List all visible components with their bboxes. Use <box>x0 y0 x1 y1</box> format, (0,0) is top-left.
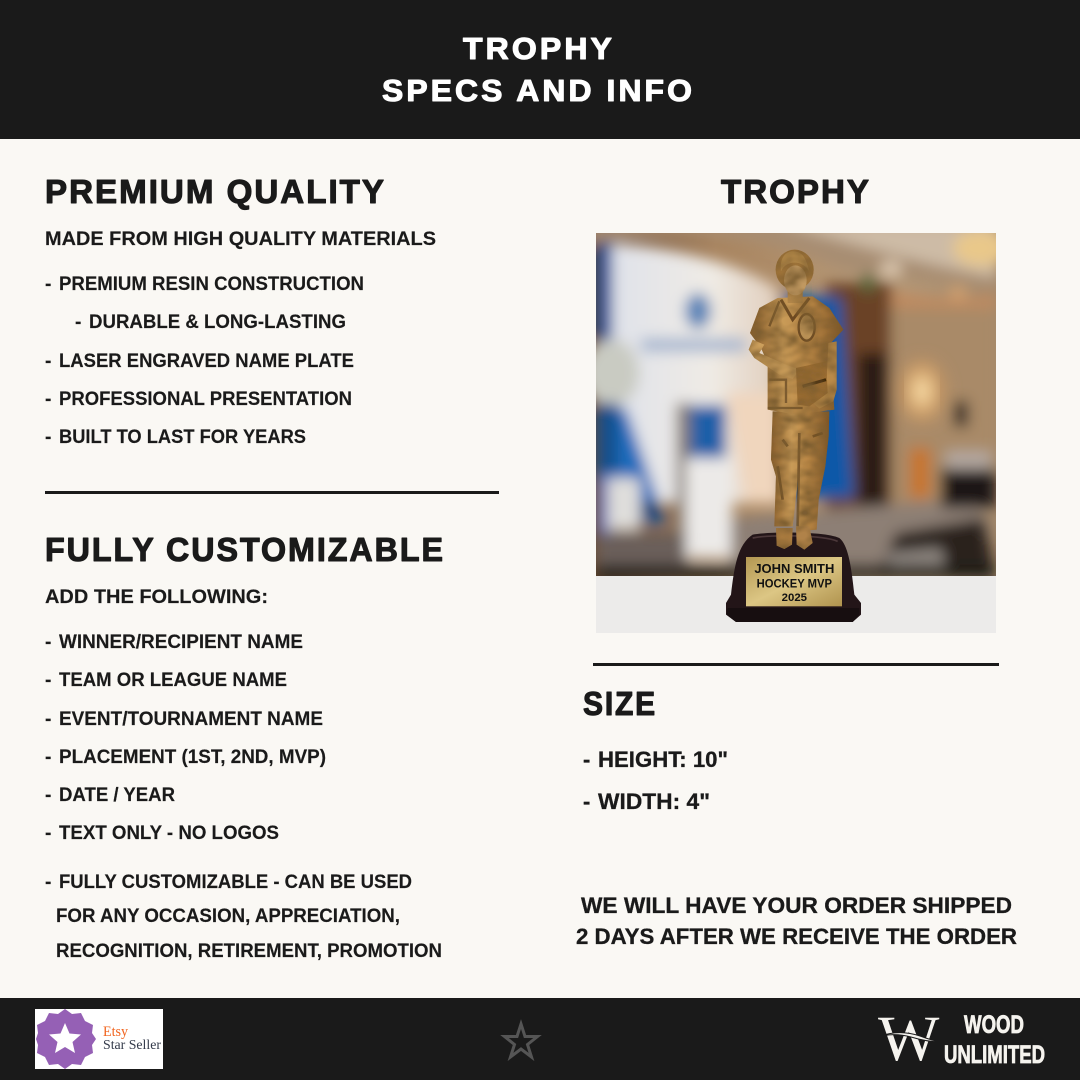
heading: premium quality: PREMIUM QUALITY <box>45 173 386 210</box>
text: height: - <box>583 747 590 772</box>
list: quality features: - <box>75 312 81 333</box>
logo text: UNLIMITED <box>944 1041 1045 1069</box>
text: occasions note: - <box>45 872 51 893</box>
icon: star <box>504 1024 538 1057</box>
shipping note: 2 DAYS AFTER WE RECEIVE THE ORDER <box>576 924 1017 949</box>
heading: trophy: TROPHY <box>721 173 871 210</box>
trophy figure <box>726 250 861 622</box>
logo text: WOOD <box>964 1011 1024 1039</box>
list: custom options: TEAM OR LEAGUE NAME <box>59 670 287 691</box>
list: custom options: - <box>45 632 51 653</box>
header title line 1: TROPHY <box>463 31 615 66</box>
etsy star seller badge <box>35 1009 163 1069</box>
shipping note: WE WILL HAVE YOUR ORDER SHIPPED <box>581 893 1012 918</box>
list: quality features: - <box>45 351 51 372</box>
torso <box>750 296 843 415</box>
clipboard <box>796 361 828 406</box>
list: custom options: EVENT/TOURNAMENT NAME <box>59 709 323 730</box>
shoes <box>776 528 793 549</box>
text: width: - <box>583 789 590 814</box>
text: width: WIDTH: 4" <box>598 789 710 814</box>
panel: fully customizable <box>45 531 445 962</box>
list: custom options: TEXT ONLY - NO LOGOS <box>59 823 279 844</box>
legs <box>771 411 829 531</box>
shipping note <box>576 893 1017 949</box>
text: add the following: ADD THE FOLLOWING: <box>45 587 268 608</box>
trophy base <box>726 532 861 622</box>
heading: size: SIZE <box>583 685 657 722</box>
text: occasions note <box>45 872 442 962</box>
logo text <box>944 1011 1045 1069</box>
header banner <box>0 0 1080 139</box>
list: custom options: - <box>45 709 51 730</box>
badge text <box>103 1024 162 1052</box>
list: quality features: PROFESSIONAL PRESENTATION <box>59 389 352 410</box>
list: quality features: LASER ENGRAVED NAME PLATE <box>59 351 354 372</box>
badge text: Star Seller <box>103 1037 162 1052</box>
blurred venue background <box>596 233 996 576</box>
trophy photo <box>583 223 1009 633</box>
panel: premium quality <box>45 173 436 448</box>
text: occasions note: FULLY CUSTOMIZABLE - CAN BE USED <box>59 872 412 893</box>
list: custom options: PLACEMENT (1ST, 2ND, MVP) <box>59 747 326 768</box>
arms <box>748 340 796 377</box>
neck <box>788 292 803 303</box>
plate text: HOCKEY MVP <box>757 577 832 590</box>
list: quality features: PREMIUM RESIN CONSTRUCTION <box>59 274 364 295</box>
list: quality features: BUILT TO LAST FOR YEARS <box>59 427 306 448</box>
list: custom options: - <box>45 747 51 768</box>
header title line 2: SPECS AND INFO <box>382 73 695 108</box>
list: quality features: - <box>45 427 51 448</box>
plate text <box>754 564 834 601</box>
list: custom options: - <box>45 785 51 806</box>
name plate <box>746 557 842 606</box>
heading: fully customizable: FULLY CUSTOMIZABLE <box>45 531 445 568</box>
logo mark: W <box>878 1003 940 1075</box>
list: custom options <box>45 632 326 844</box>
list: custom options: DATE / YEAR <box>59 785 175 806</box>
text: height: HEIGHT: 10" <box>598 747 728 772</box>
footer banner <box>0 998 1080 1080</box>
list: custom options: WINNER/RECIPIENT NAME <box>59 632 303 653</box>
plate text: JOHN SMITH <box>754 561 834 576</box>
list: quality features: - <box>45 274 51 295</box>
white table <box>596 576 996 633</box>
list: quality features: - <box>45 389 51 410</box>
head <box>776 250 814 290</box>
text: occasions note: RECOGNITION, RETIREMENT, PROMOTION <box>56 941 442 962</box>
list: custom options: - <box>45 670 51 691</box>
badge icon <box>36 1009 96 1069</box>
panel: size <box>583 685 728 814</box>
text: occasions note: FOR ANY OCCASION, APPRECIATION, <box>56 906 400 927</box>
list: quality features: DURABLE & LONG-LASTING <box>89 312 346 333</box>
badge text: Etsy <box>103 1024 128 1040</box>
list: quality features <box>45 274 364 448</box>
wood unlimited logo <box>878 1003 1045 1075</box>
text: intro line: MADE FROM HIGH QUALITY MATERIALS <box>45 229 436 250</box>
plate text: 2025 <box>782 592 807 604</box>
list: custom options: - <box>45 823 51 844</box>
bronze figure <box>749 250 843 550</box>
